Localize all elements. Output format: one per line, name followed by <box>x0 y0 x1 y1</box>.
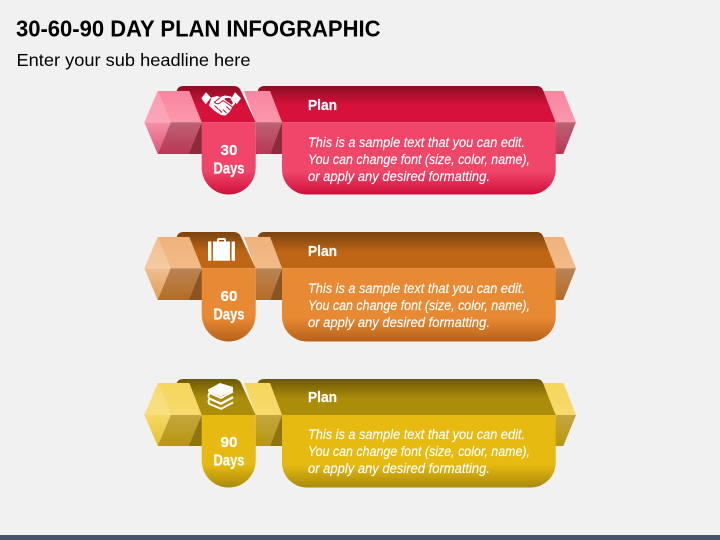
right arrow tip <box>543 383 576 446</box>
day label <box>214 288 244 324</box>
plan heading: Plan <box>308 389 337 406</box>
day label: Days <box>214 160 244 178</box>
plan description: You can change font (size, color, name), <box>308 298 530 313</box>
title: 30-60-90 DAY PLAN INFOGRAPHIC <box>16 16 380 42</box>
plan description <box>308 281 530 330</box>
plan description: or apply any desired formatting. <box>308 461 490 476</box>
plan description: You can change font (size, color, name), <box>308 444 530 459</box>
plan body panel <box>282 268 556 342</box>
row: 30 days plan <box>144 86 576 194</box>
plan description: You can change font (size, color, name), <box>308 152 530 167</box>
plan description: This is a sample text that you can edit. <box>308 427 525 442</box>
middle connector prism <box>244 237 283 300</box>
day tab pill <box>202 415 256 488</box>
row: 60 days plan <box>144 232 576 342</box>
left hexagon prism <box>144 237 203 300</box>
plan heading: Plan <box>308 243 337 260</box>
icon: briefcase <box>208 238 235 261</box>
plan body panel <box>282 122 556 194</box>
day tab pill <box>202 122 256 194</box>
plan header bar <box>258 86 556 122</box>
day tab header <box>177 86 256 122</box>
left hexagon prism <box>144 383 203 446</box>
middle connector prism <box>244 383 283 446</box>
day label <box>214 142 244 178</box>
icon: handshake <box>201 92 241 116</box>
day label: 30 <box>220 142 238 159</box>
plan header bar <box>258 232 556 268</box>
subtitle: Enter your sub headline here <box>16 50 250 70</box>
plan description <box>308 135 530 184</box>
icon: books <box>208 383 233 409</box>
day label: Days <box>214 452 244 470</box>
footer bar <box>0 535 720 540</box>
plan body panel <box>282 415 556 488</box>
left hexagon prism <box>144 91 203 154</box>
middle connector prism <box>244 91 283 154</box>
plan description: or apply any desired formatting. <box>308 315 490 330</box>
day label: 60 <box>220 288 238 305</box>
day tab header <box>177 379 256 415</box>
plan description: This is a sample text that you can edit. <box>308 135 525 150</box>
plan description: This is a sample text that you can edit. <box>308 281 525 296</box>
right arrow tip <box>543 91 576 154</box>
plan header bar <box>258 379 556 415</box>
plan description: or apply any desired formatting. <box>308 169 490 184</box>
day label <box>214 434 244 470</box>
day label: Days <box>214 306 244 324</box>
plan description <box>308 427 530 476</box>
row: 90 days plan <box>144 379 576 488</box>
day tab pill <box>202 268 256 342</box>
right arrow tip <box>543 237 576 300</box>
day tab header <box>177 232 256 268</box>
plan heading: Plan <box>308 97 337 114</box>
day label: 90 <box>220 434 238 451</box>
